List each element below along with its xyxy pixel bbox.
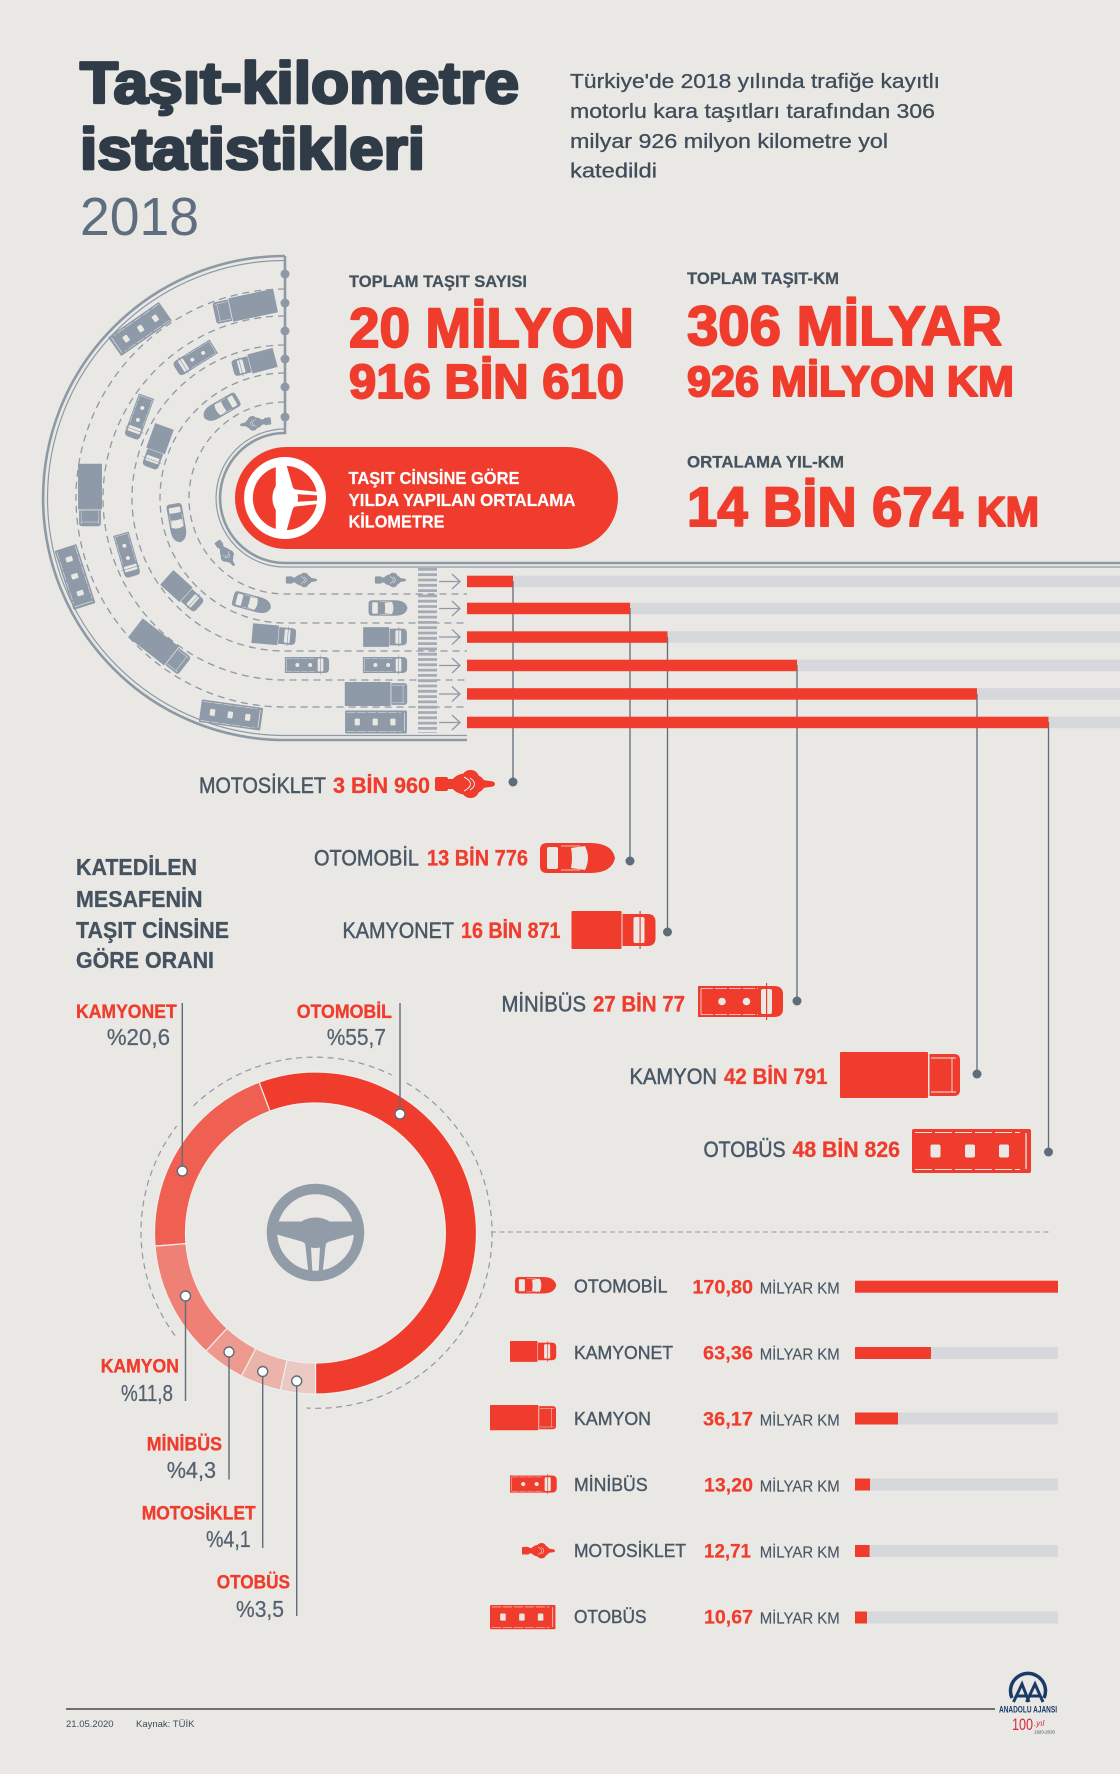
red bars — [467, 576, 1048, 728]
footer — [66, 1709, 995, 1730]
intro text: katedildi — [570, 160, 657, 182]
red pill — [235, 447, 618, 549]
row units: MİLYAR KM — [760, 1543, 840, 1561]
heading: share of distance — [76, 854, 229, 973]
stat: total vehicle-km — [687, 269, 1014, 406]
label: otobus: 48 BİN 826 — [792, 1137, 900, 1162]
donut leaders — [177, 1003, 405, 1616]
donut labels: %3,5 — [236, 1596, 284, 1622]
row units: MİLYAR KM — [760, 1345, 840, 1363]
row values — [692, 1277, 753, 1628]
label: kamyon — [630, 1052, 960, 1098]
donut labels: MİNİBÜS — [147, 1432, 222, 1456]
stat: total vehicles: TOPLAM TAŞIT SAYISI — [349, 272, 527, 291]
logo: Anadolu Ajansi: 1920-2020 — [1034, 1730, 1055, 1734]
label: kamyon: 42 BİN 791 — [724, 1064, 828, 1089]
row values: 36,17 — [703, 1409, 753, 1430]
donut labels: KAMYON — [101, 1356, 179, 1378]
row tracks — [855, 1347, 1058, 1624]
stat: total vehicle-km: 306 MİLYAR — [687, 294, 1002, 357]
intro text: Türkiye'de 2018 yılında trafiğe kayıtlı — [570, 70, 940, 93]
row names: MİNİBÜS — [574, 1474, 648, 1495]
heading: share of distance: KATEDİLEN — [76, 854, 197, 880]
label: otobus — [704, 1129, 1031, 1173]
row names: OTOBÜS — [574, 1606, 646, 1627]
donut labels: %4,1 — [206, 1526, 251, 1552]
logo: Anadolu Ajansi — [999, 1673, 1057, 1734]
donut labels: %55,7 — [327, 1024, 386, 1050]
label: motosiklet — [199, 770, 495, 798]
label: motosiklet: 3 BİN 960 — [333, 773, 430, 798]
label: kamyonet — [342, 911, 656, 949]
stat: total vehicles: 916 BİN 610 — [349, 356, 624, 409]
label: minibus: MİNİBÜS — [502, 992, 586, 1017]
row values: 10,67 — [704, 1607, 753, 1628]
label: minibus — [502, 983, 783, 1020]
row values: 170,80 — [692, 1277, 753, 1298]
year: 2018 — [80, 187, 199, 247]
row names: KAMYON — [574, 1408, 651, 1429]
stat: total vehicles — [349, 272, 634, 409]
road diagram — [43, 256, 1120, 740]
pill text: KİLOMETRE — [348, 512, 444, 532]
donut labels: OTOMOBİL — [297, 1000, 392, 1023]
road pins — [280, 270, 290, 422]
title: Taşıt-kilometre — [80, 51, 519, 116]
donut labels: KAMYONET — [76, 1001, 177, 1023]
crosswalk — [418, 568, 437, 733]
donut labels: %11,8 — [121, 1380, 173, 1406]
title — [80, 51, 519, 182]
stat: average annual km — [687, 452, 1039, 538]
row bars — [855, 1281, 1058, 1624]
gray bar tracks — [513, 576, 1120, 728]
row values: 12,71 — [704, 1541, 751, 1562]
row names: OTOMOBİL — [574, 1276, 668, 1297]
row units: MİLYAR KM — [760, 1279, 840, 1297]
logo: Anadolu Ajansi: .yıl — [1034, 1719, 1044, 1728]
row icons — [490, 1277, 557, 1629]
footer: 21.05.2020 — [66, 1719, 114, 1730]
pill text: YILDA YAPILAN ORTALAMA — [348, 490, 576, 510]
logo: Anadolu Ajansi: ANADOLU AJANSI — [999, 1705, 1057, 1715]
stat: total vehicles: 20 MİLYON — [349, 296, 634, 359]
label: otobus: OTOBÜS — [704, 1137, 786, 1162]
lane arrows — [439, 574, 460, 730]
table: billion km by vehicle — [490, 1276, 1058, 1629]
icon: steering wheel — [272, 1189, 359, 1276]
stat: average annual km: KM — [977, 488, 1039, 535]
stat: average annual km: 14 BİN 674 — [687, 475, 963, 538]
row values: 63,36 — [703, 1343, 753, 1364]
row names: MOTOSİKLET — [574, 1540, 686, 1561]
icon: steering wheel — [248, 461, 322, 535]
label: otomobil — [314, 843, 615, 873]
donut labels: %4,3 — [167, 1457, 216, 1483]
stat: total vehicle-km: TOPLAM TAŞIT-KM — [687, 269, 839, 288]
donut chart — [141, 1057, 492, 1408]
heading: share of distance: GÖRE ORANI — [76, 947, 214, 973]
intro text: milyar 926 milyon kilometre yol — [570, 130, 888, 153]
intro text — [570, 70, 940, 182]
label: kamyon: KAMYON — [630, 1064, 717, 1089]
row units — [760, 1279, 840, 1627]
pill text: TAŞIT CİNSİNE GÖRE — [348, 468, 520, 488]
row units: MİLYAR KM — [760, 1477, 840, 1495]
row units: MİLYAR KM — [760, 1609, 840, 1627]
row names: KAMYONET — [574, 1342, 673, 1363]
label: minibus: 27 BİN 77 — [593, 992, 685, 1017]
label: motosiklet: MOTOSİKLET — [199, 773, 326, 798]
heading: share of distance: TAŞIT CİNSİNE — [76, 917, 229, 943]
stat: total vehicle-km: 926 MİLYON KM — [687, 358, 1014, 406]
donut labels — [76, 1000, 392, 1622]
footer: Kaynak: TÜİK — [136, 1719, 195, 1730]
donut labels: OTOBÜS — [217, 1571, 290, 1594]
intro text: motorlu kara taşıtları tarafından 306 — [570, 100, 935, 123]
logo: Anadolu Ajansi: 100 — [1012, 1715, 1033, 1734]
heading: share of distance: MESAFENİN — [76, 886, 202, 912]
title: istatistikleri — [80, 117, 425, 182]
row values: 13,20 — [704, 1475, 753, 1496]
leader lines — [508, 581, 1053, 1156]
label: otomobil: OTOMOBİL — [314, 846, 419, 871]
label: kamyonet: KAMYONET — [342, 918, 454, 943]
vehicles on the road — [55, 289, 408, 733]
label: kamyonet: 16 BİN 871 — [461, 918, 560, 943]
row names — [574, 1276, 686, 1627]
pill text — [348, 468, 576, 532]
label: otomobil: 13 BİN 776 — [427, 846, 528, 871]
donut labels: MOTOSİKLET — [142, 1502, 256, 1525]
donut labels: %20,6 — [107, 1024, 170, 1050]
stat: average annual km: ORTALAMA YIL-KM — [687, 452, 844, 472]
row units: MİLYAR KM — [760, 1411, 840, 1429]
